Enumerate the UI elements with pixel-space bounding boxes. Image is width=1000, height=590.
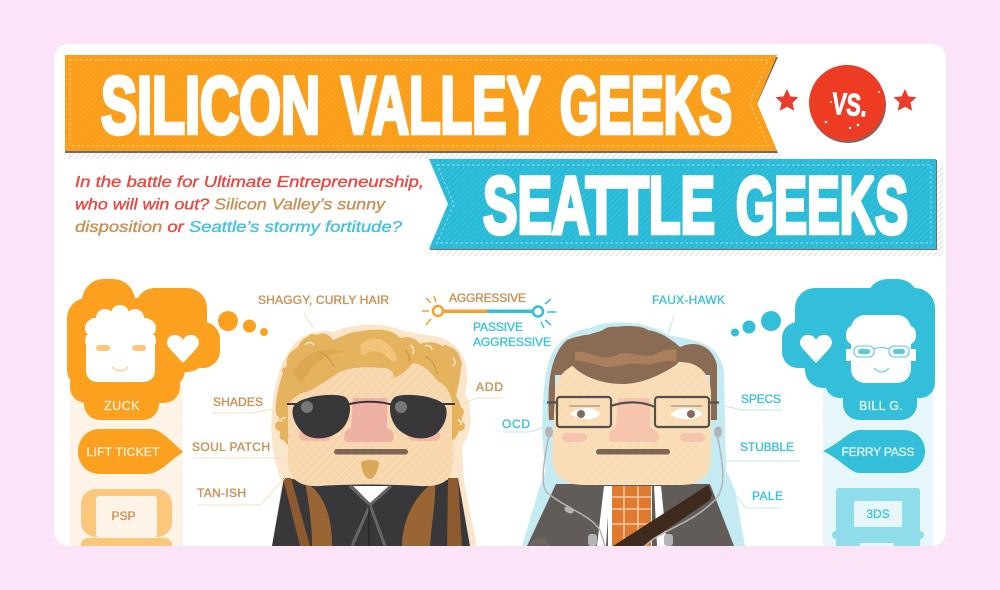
sunglasses (287, 395, 455, 438)
vs text: VS. (831, 86, 868, 123)
halo (522, 322, 745, 546)
label: Zuck: ZUCK (104, 399, 140, 413)
labels: Seattle traits: SPECS (741, 392, 781, 406)
character: Seattle geek (522, 322, 745, 546)
hair back (548, 326, 717, 420)
labels: Silicon Valley traits (192, 293, 503, 505)
icon: PSP: PSP (111, 509, 136, 523)
earphone cables (543, 435, 723, 546)
callout: ferry pass (823, 430, 925, 473)
icon: 3DS: 3DS (866, 507, 890, 521)
meter: aggressive to passive aggressive: AGGRESSIVE (473, 335, 551, 349)
earbuds (545, 426, 553, 438)
title: Silicon Valley Geeks (100, 74, 732, 136)
icon: Zuck face (85, 305, 156, 382)
icon: heart (800, 335, 832, 363)
intro text (75, 174, 424, 236)
labels: Silicon Valley traits: SHAGGY, CURLY HAIR (258, 293, 389, 307)
halo (271, 325, 477, 546)
thought bubble: Bill G. (731, 279, 935, 420)
thought dots (218, 311, 268, 336)
hair front (566, 327, 680, 384)
body (527, 435, 734, 546)
callout: lift ticket: LIFT TICKET (86, 445, 160, 459)
icon: heart (167, 335, 199, 363)
card background (54, 44, 946, 546)
orange title banner (65, 55, 778, 153)
labels: Seattle traits: STUBBLE (740, 440, 794, 454)
thought dots (731, 311, 781, 336)
mouth (596, 449, 670, 454)
title: Seattle Geeks (482, 174, 908, 236)
icon: Bill G. face (846, 315, 916, 383)
title: Silicon Valley Geeks: VALLEY (341, 61, 541, 151)
hair (275, 330, 465, 445)
versus badge (776, 65, 916, 143)
nose (344, 398, 394, 442)
blue title banner (429, 159, 937, 251)
head (288, 362, 453, 486)
labels: Seattle traits (502, 293, 800, 508)
head (552, 362, 711, 485)
labels: Seattle traits: FAUX-HAWK (652, 293, 725, 307)
icon: PSP (81, 489, 172, 552)
labels: Silicon Valley traits: SOUL PATCH (192, 440, 270, 454)
soul patch (361, 460, 379, 479)
star left (776, 89, 798, 111)
meter: aggressive to passive aggressive: AGGRESSIVE (449, 291, 526, 305)
callout: lift ticket (78, 429, 183, 474)
intro text: In the battle for Ultimate Entrepreneurship, (75, 174, 424, 191)
cheeks (562, 433, 587, 442)
labels: Silicon Valley traits: TAN-ISH (197, 486, 246, 500)
glasses (547, 397, 719, 427)
panel: Seattle column (731, 279, 935, 550)
character: Silicon Valley geek (271, 325, 477, 546)
intro text: disposition or Seattle’s stormy fortitude? (75, 219, 402, 236)
eyes (569, 406, 703, 419)
labels: Silicon Valley traits: ADD (476, 380, 503, 394)
nose (609, 398, 659, 442)
thought bubble: Zuck (67, 279, 268, 420)
icon: 3DS (832, 488, 924, 550)
title: Silicon Valley Geeks: SILICON (101, 61, 320, 151)
meter: aggressive to passive aggressive (422, 291, 556, 349)
title: Silicon Valley Geeks: GEEKS (560, 61, 732, 151)
title: Seattle Geeks: SEATTLE (483, 161, 715, 251)
body (272, 478, 470, 546)
meter: aggressive to passive aggressive: PASSIVE (473, 320, 523, 334)
labels: Silicon Valley traits: SHADES (213, 395, 263, 409)
cheeks (299, 430, 331, 441)
panel: Silicon Valley column (67, 279, 268, 552)
mouth (334, 449, 408, 454)
intro text: who will win out? Silicon Valley’s sunny (75, 196, 386, 214)
label: Bill G.: BILL G. (859, 399, 903, 413)
callout: ferry pass: FERRY PASS (842, 445, 914, 459)
labels: Seattle traits: PALE (752, 489, 783, 503)
labels: Seattle traits: OCD (502, 417, 530, 431)
star right (894, 89, 916, 111)
